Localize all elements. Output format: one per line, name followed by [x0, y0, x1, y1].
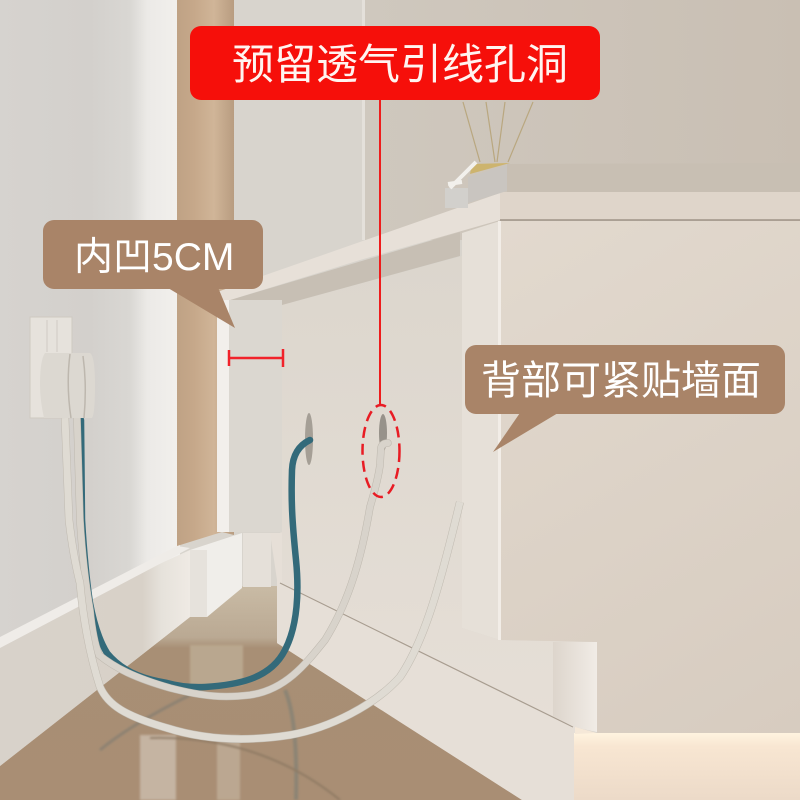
wall plug: [40, 353, 95, 418]
back panel of cabinet: [270, 256, 597, 800]
callout: back fits against wall: 背部可紧贴墙面: [481, 359, 761, 403]
decor on countertop: [445, 102, 800, 208]
left wall: [0, 0, 180, 660]
title banner: 预留透气引线孔洞: [232, 41, 568, 88]
floor reflections: [100, 645, 340, 800]
white cable with hook through vent hole: [77, 418, 388, 697]
under-cabinet LED glow: [574, 727, 800, 800]
blue cable: [81, 420, 310, 687]
callout: recess 5cm: [43, 220, 263, 328]
right cabinet body: [462, 221, 800, 733]
right wall: [362, 0, 800, 240]
wall baseboard: [0, 546, 190, 766]
white door frame base: [190, 533, 271, 617]
wall switch plate: [30, 317, 72, 418]
dashed highlight ellipse: [362, 405, 400, 497]
floor: [0, 586, 522, 800]
far wall: [230, 0, 370, 600]
countertop: [217, 192, 800, 305]
callout: recess 5cm: 内凹5CM: [74, 236, 234, 279]
cable holes: [305, 413, 387, 465]
title banner: [190, 26, 600, 100]
red leader line: [379, 98, 381, 405]
wood column: [177, 0, 234, 546]
callout: back fits against wall: [465, 345, 785, 452]
dimension marker: [229, 349, 283, 367]
cabinet left leg: [217, 298, 282, 532]
long white cable: [65, 418, 460, 739]
